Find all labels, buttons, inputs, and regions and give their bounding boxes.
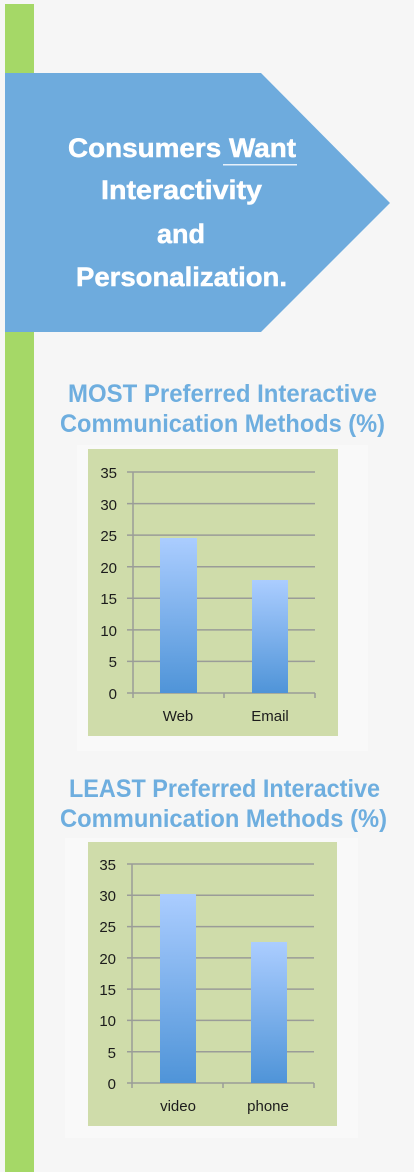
y axis labels: 30 — [100, 497, 117, 514]
y axis labels — [99, 857, 116, 1093]
y axis labels: 0 — [109, 686, 117, 703]
banner title: Consumers Want — [68, 133, 296, 163]
y axis labels: 35 — [99, 857, 116, 874]
heading: most preferred: MOST Preferred Interactive — [68, 380, 377, 408]
y axis labels: 10 — [100, 623, 117, 640]
y axis labels: 15 — [99, 982, 116, 999]
y axis labels — [100, 465, 117, 703]
y axis labels: 20 — [100, 560, 117, 577]
y axis labels: 25 — [100, 528, 117, 545]
x axis labels: Web — [163, 708, 193, 725]
banner title: Personalization. — [76, 262, 287, 292]
y axis labels: 20 — [99, 951, 116, 968]
y axis labels: 10 — [99, 1013, 116, 1030]
bar chart: most preferred — [77, 445, 368, 751]
banner title: and — [157, 219, 205, 249]
banner title: Interactivity — [101, 175, 262, 205]
y axis labels: 15 — [100, 591, 117, 608]
y axis labels: 30 — [99, 888, 116, 905]
bar: phone — [251, 942, 287, 1083]
y axis labels: 35 — [100, 465, 117, 482]
x axis labels — [160, 1098, 289, 1115]
bar: video — [160, 894, 196, 1083]
y axis labels: 5 — [109, 654, 117, 671]
bar chart: least preferred — [65, 838, 358, 1138]
y axis labels: 25 — [99, 919, 116, 936]
x axis labels — [163, 708, 289, 725]
banner: arrow with title — [5, 73, 390, 332]
x axis labels: phone — [247, 1098, 289, 1115]
y axis labels: 5 — [108, 1045, 116, 1062]
bar: Web — [160, 538, 197, 693]
heading: least preferred: LEAST Preferred Interactive — [69, 775, 380, 803]
heading: most preferred — [60, 380, 385, 438]
x axis labels: Email — [251, 708, 289, 725]
heading: most preferred: Communication Methods (%) — [60, 410, 385, 438]
x axis labels: video — [160, 1098, 196, 1115]
bar: Email — [252, 580, 288, 693]
green vertical stripe — [5, 4, 34, 1172]
banner title — [68, 133, 297, 292]
y axis labels: 0 — [108, 1076, 116, 1093]
heading: least preferred: Communication Methods (%) — [60, 805, 387, 833]
banner arrow shape — [5, 73, 390, 332]
heading: least preferred — [60, 775, 387, 833]
